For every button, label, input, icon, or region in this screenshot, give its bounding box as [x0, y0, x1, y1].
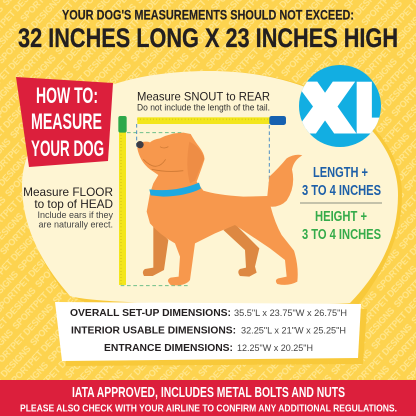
- dog ear and face lines: [143, 147, 183, 171]
- panel: dimensions: 32.25"L x 21"W x 25.25"H: [241, 326, 346, 336]
- heading: measurement limit: [18, 6, 398, 53]
- dog collar: [149, 183, 201, 197]
- panel: dimensions: 35.5"L x 23.75"W x 26.75"H: [234, 308, 347, 318]
- text: height allowance: 3 TO 4 INCHES: [302, 227, 381, 243]
- illustration: dog with tape measures: [118, 116, 302, 286]
- text: measure snout to rear: Measure SNOUT to REAR: [137, 90, 270, 104]
- text: measure snout to rear: Do not include the length of the tail.: [137, 102, 270, 112]
- dashed guide lines: [121, 124, 269, 286]
- text: height allowance: HEIGHT +: [315, 209, 367, 225]
- text: measure floor to head: Include ears if they: [37, 210, 113, 220]
- panel: dimensions: 12.25"W x 20.25"H: [237, 343, 313, 353]
- badge: XL size: L: [357, 74, 389, 143]
- panel: dimensions: ENTRANCE DIMENSIONS:: [104, 342, 233, 354]
- text: measure snout to rear: [137, 90, 270, 112]
- divider: [300, 202, 382, 204]
- text: height allowance: [302, 209, 381, 243]
- text: measure floor to head: are naturally erect.: [38, 220, 113, 230]
- dog body: [137, 133, 302, 285]
- panel: dimensions: [55, 302, 367, 366]
- badge: XL size: [299, 65, 389, 147]
- panel: dimensions: INTERIOR USABLE DIMENSIONS:: [71, 324, 236, 336]
- dog far legs: [143, 223, 259, 277]
- dog nose: [136, 141, 144, 148]
- text: length allowance: 3 TO 4 INCHES: [302, 183, 381, 199]
- text: length allowance: [302, 165, 381, 199]
- panel: cream measuring area: [22, 71, 402, 305]
- panel: dimensions: OVERALL SET-UP DIMENSIONS:: [70, 307, 231, 319]
- banner: how to measure your dog: HOW TO:: [36, 83, 98, 108]
- banner: how to measure your dog: [16, 77, 113, 167]
- horizontal tape: [137, 116, 286, 125]
- text: measure floor to head: [23, 185, 113, 230]
- footer banner: [0, 380, 416, 416]
- text: length allowance: LENGTH +: [313, 165, 368, 181]
- banner: how to measure your dog: YOUR DOG: [31, 136, 104, 161]
- vertical tape: [118, 116, 127, 285]
- badge: XL size: X: [302, 74, 348, 143]
- banner: how to measure your dog: MEASURE: [31, 109, 102, 134]
- text: measure floor to head: to top of HEAD: [34, 197, 113, 211]
- text: measure floor to head: Measure FLOOR: [23, 185, 113, 199]
- dog ear: [187, 142, 204, 183]
